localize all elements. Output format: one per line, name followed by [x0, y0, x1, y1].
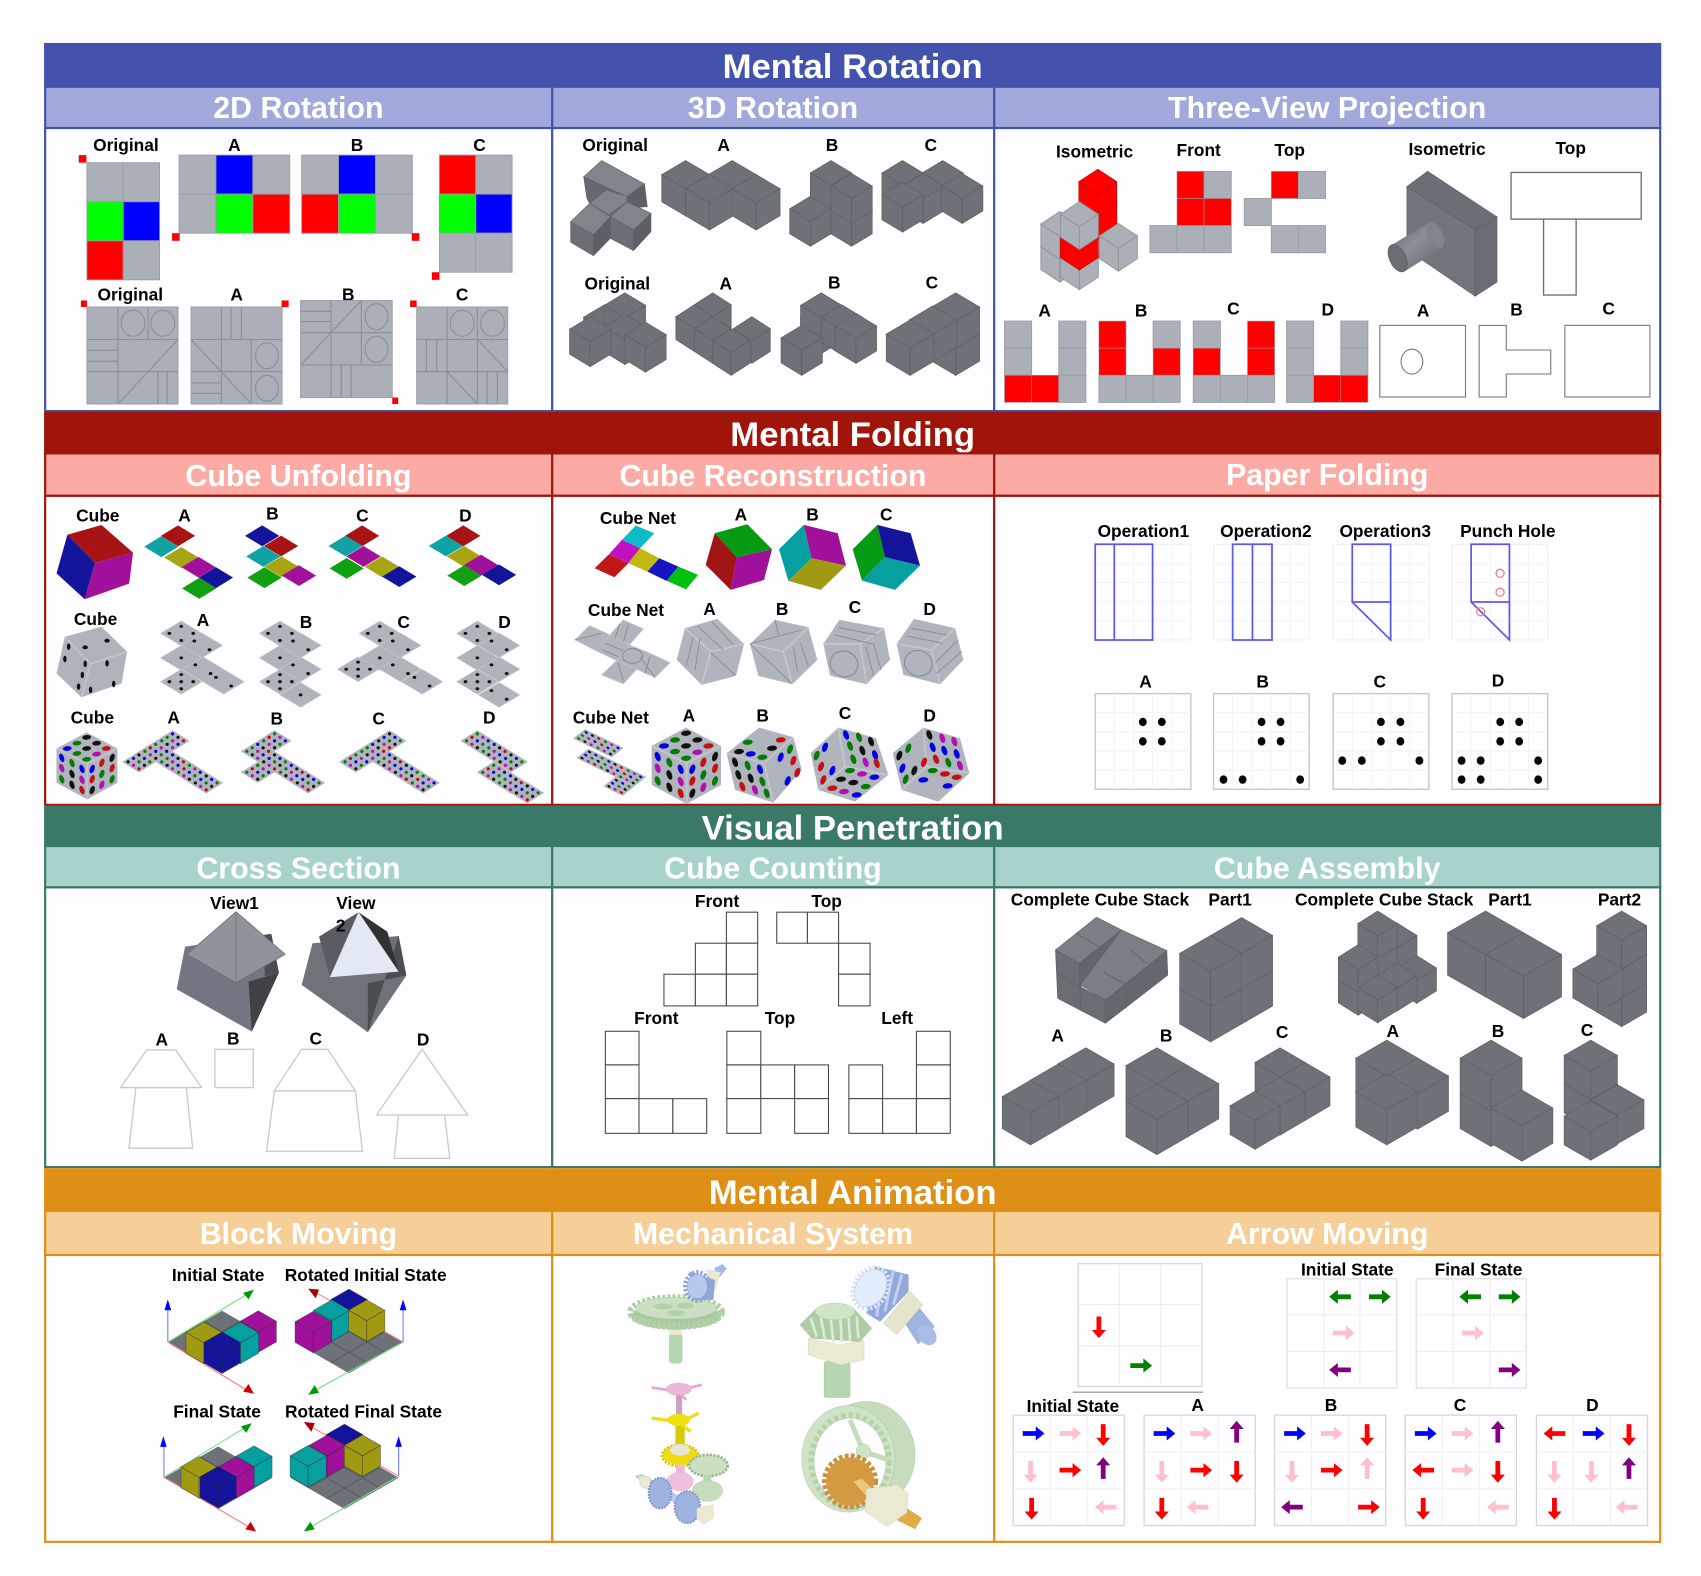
- subheading: 2D Rotation: 2D Rotation: [213, 92, 384, 125]
- multicolor net and cubes: C: [839, 703, 852, 723]
- gray patterned net and cubes: Cube Net: [588, 600, 664, 620]
- colored cube and nets: [57, 504, 516, 599]
- colored net and cubes: [595, 505, 920, 590]
- subheading: Cube Unfolding: [45, 453, 552, 496]
- assembly puzzle 1: C: [1276, 1022, 1289, 1042]
- outline answer options: C: [1602, 299, 1615, 319]
- subheading: 2D Rotation: [45, 87, 552, 128]
- bevel gear pair: [800, 1261, 941, 1397]
- panel: 3D Rotation: [552, 87, 994, 411]
- section header: Visual Penetration: [44, 806, 1661, 848]
- colored cube and nets: C: [356, 506, 369, 526]
- projection set 1: [664, 891, 870, 1006]
- solid view 2: 2: [336, 916, 346, 936]
- block figures row 2: C: [926, 273, 939, 293]
- subheading: 3D Rotation: [552, 87, 994, 128]
- punch hole answers: C: [1374, 672, 1387, 692]
- gray patterned net and cubes: [575, 597, 963, 685]
- assembly puzzle 2: [1295, 890, 1647, 1161]
- punch hole answers: A: [1139, 672, 1152, 692]
- subheading: Cross Section: [45, 846, 552, 887]
- gray patterned net and cubes: B: [776, 599, 788, 619]
- U-shaped answer options: B: [1135, 301, 1147, 321]
- subheading: Cube Unfolding: Cube Unfolding: [185, 460, 411, 493]
- projection set 2: Front: [634, 1008, 679, 1028]
- projection set 1: Front: [695, 891, 739, 911]
- gear pair with horizontal crown wheel: [631, 1264, 727, 1363]
- dotted die and nets: A: [197, 610, 210, 630]
- U-shaped answer options: [1005, 299, 1368, 402]
- dotted die and nets: B: [300, 612, 312, 632]
- colored grid row: [79, 135, 512, 280]
- folding operations: [1095, 521, 1556, 640]
- patterned tile row: Original: [98, 284, 163, 304]
- multicolor dotted cube and nets: [56, 707, 544, 803]
- subheading: Cube Assembly: [994, 846, 1660, 887]
- panel: Cube Unfolding: [45, 453, 552, 805]
- subheading: Mechanical System: [552, 1211, 994, 1255]
- cross section options: D: [417, 1030, 429, 1050]
- section: Mental Rotation: [44, 43, 1661, 411]
- dotted die and nets: Cube: [74, 609, 118, 629]
- answer arrow grids: A: [1191, 1395, 1204, 1415]
- cross section options: B: [227, 1029, 240, 1049]
- folding operations: Operation2: [1220, 521, 1312, 541]
- colored net and cubes: C: [880, 505, 893, 525]
- punch hole answers: D: [1492, 671, 1504, 691]
- gray patterned net and cubes: D: [923, 599, 936, 619]
- section header: Visual Penetration: Visual Penetration: [702, 810, 1004, 848]
- panel: Cube Counting: [552, 846, 994, 1167]
- multicolor dotted cube and nets: D: [483, 707, 496, 727]
- subheading: Cube Counting: [552, 846, 994, 887]
- assembly puzzle 2: C: [1581, 1020, 1594, 1040]
- section header: Mental Rotation: Mental Rotation: [723, 48, 983, 86]
- subheading: Cross Section: Cross Section: [196, 853, 400, 886]
- panel: Cube Assembly: [994, 846, 1660, 1167]
- initial state blocks: [164, 1265, 276, 1394]
- cross section options: C: [310, 1029, 323, 1049]
- subheading: Cube Counting: Cube Counting: [664, 853, 882, 886]
- subheading: Paper Folding: Paper Folding: [1226, 459, 1428, 492]
- block figures row 2: Original: [585, 274, 650, 294]
- answer arrow grids: C: [1454, 1395, 1467, 1415]
- ring and pinion gear: [802, 1401, 922, 1529]
- answer arrow grids: Initial State: [1027, 1396, 1119, 1416]
- block figures row 1: B: [826, 135, 838, 155]
- colored cube and nets: Cube: [76, 506, 120, 526]
- isometric cube stack with views: Isometric: [1056, 141, 1133, 161]
- isometric plate with cylinder and top view: Isometric: [1408, 139, 1486, 159]
- block figures row 1: Original: [582, 135, 648, 155]
- panel: Paper Folding: [994, 453, 1660, 805]
- final state blocks: Final State: [173, 1402, 261, 1422]
- subheading: Block Moving: Block Moving: [200, 1218, 397, 1251]
- U-shaped answer options: A: [1038, 301, 1051, 321]
- answer arrow grids: B: [1325, 1395, 1337, 1415]
- outline answer options: B: [1510, 300, 1523, 320]
- answer arrow grids: [1013, 1395, 1648, 1525]
- panel: Block Moving: [45, 1211, 552, 1542]
- section header: Mental Rotation: [44, 43, 1661, 87]
- isometric cube stack with views: Top: [1275, 140, 1305, 160]
- folding operations: Punch Hole: [1460, 521, 1556, 541]
- multicolor net and cubes: D: [923, 705, 936, 725]
- section: Visual Penetration: [44, 806, 1661, 1167]
- final state blocks: [160, 1402, 272, 1532]
- solid view 2: View: [336, 893, 376, 913]
- gray patterned net and cubes: C: [849, 597, 862, 617]
- assembly puzzle 1: A: [1051, 1025, 1064, 1045]
- assembly puzzle 1: Complete Cube Stack: [1011, 890, 1189, 910]
- assembly puzzle 1: Part1: [1208, 890, 1252, 910]
- patterned tile row: C: [456, 284, 469, 304]
- block figures row 2: A: [719, 274, 732, 294]
- colored cube and nets: B: [266, 504, 279, 524]
- dotted die and nets: [57, 609, 520, 707]
- patterned tile row: [81, 284, 508, 404]
- assembly puzzle 2: A: [1387, 1021, 1400, 1041]
- panel: Mechanical System: [552, 1211, 994, 1542]
- multicolor dotted cube and nets: A: [167, 707, 180, 727]
- subheading: Three-View Projection: [994, 87, 1660, 128]
- cross section options: A: [155, 1030, 168, 1050]
- assembly puzzle 2: B: [1492, 1021, 1504, 1041]
- solid view 1: [177, 893, 285, 1032]
- subheading: Paper Folding: [994, 453, 1660, 496]
- isometric plate with cylinder and top view: [1384, 138, 1641, 296]
- rotated final state blocks: [285, 1402, 442, 1532]
- panel: Three-View Projection: [994, 87, 1660, 411]
- panel: 2D Rotation: [45, 87, 552, 411]
- block figures row 2: [570, 273, 980, 375]
- gear illustrations: [631, 1261, 941, 1529]
- section header: Mental Folding: Mental Folding: [730, 416, 975, 454]
- projection set 2: [605, 1008, 950, 1133]
- projection set 2: Left: [881, 1008, 913, 1028]
- section header: Mental Animation: [44, 1168, 1661, 1212]
- dotted die and nets: C: [397, 612, 410, 632]
- large arrow grid: [1073, 1264, 1203, 1392]
- multicolor net and cubes: [569, 703, 969, 804]
- multicolor dotted cube and nets: Cube: [71, 707, 114, 727]
- assembly puzzle 1: B: [1160, 1025, 1172, 1045]
- outline answer options: A: [1417, 301, 1430, 321]
- folding operations: Operation1: [1098, 521, 1189, 541]
- patterned tile row: B: [342, 284, 355, 304]
- punch hole answers: B: [1256, 672, 1269, 692]
- block figures row 1: A: [717, 135, 730, 155]
- colored grid row: C: [473, 135, 486, 155]
- subheading: Arrow Moving: Arrow Moving: [1226, 1218, 1428, 1251]
- colored grid row: A: [228, 135, 241, 155]
- section: Mental Animation: [44, 1168, 1661, 1542]
- multicolor net and cubes: A: [683, 705, 696, 725]
- panel: Cross Section: [45, 846, 552, 1167]
- assembly puzzle 2: Complete Cube Stack: [1295, 890, 1474, 910]
- subheading: Cube Reconstruction: Cube Reconstruction: [619, 460, 926, 493]
- panel: Cube Reconstruction: [552, 453, 994, 805]
- subheading: Three-View Projection: Three-View Projection: [1168, 92, 1486, 125]
- multicolor dotted cube and nets: C: [372, 709, 385, 729]
- rotated initial state blocks: Rotated Initial State: [285, 1265, 447, 1285]
- dotted die and nets: D: [498, 612, 511, 632]
- subheading: Cube Reconstruction: [552, 453, 994, 496]
- panel: Arrow Moving: [994, 1211, 1660, 1542]
- initial and final state grids: Initial State: [1301, 1260, 1394, 1280]
- block figures row 2: B: [828, 273, 840, 293]
- subheading: Block Moving: [45, 1211, 552, 1255]
- multicolor dotted cube and nets: B: [270, 709, 283, 729]
- U-shaped answer options: C: [1227, 299, 1240, 319]
- subheading: 3D Rotation: 3D Rotation: [688, 92, 858, 125]
- punch hole answers: [1095, 671, 1548, 789]
- assembly puzzle 2: Part2: [1598, 890, 1641, 910]
- colored cube and nets: D: [459, 506, 472, 526]
- assembly puzzle 2: Part1: [1488, 890, 1532, 910]
- subheading: Cube Assembly: Cube Assembly: [1214, 853, 1441, 886]
- section header: Mental Folding: [44, 412, 1661, 454]
- U-shaped answer options: D: [1321, 300, 1334, 320]
- multi-stage gear train: [635, 1383, 728, 1524]
- assembly puzzle 1: [1002, 890, 1330, 1155]
- colored net and cubes: B: [806, 505, 819, 525]
- initial and final state grids: Final State: [1435, 1260, 1523, 1280]
- block figures row 1: C: [924, 135, 937, 155]
- subheading: Mechanical System: Mechanical System: [633, 1218, 913, 1251]
- colored net and cubes: A: [735, 505, 748, 525]
- projection set 2: Top: [765, 1008, 795, 1028]
- solid view 2: [302, 893, 406, 1032]
- outline answer options: [1380, 299, 1650, 397]
- rotated final state blocks: Rotated Final State: [285, 1402, 442, 1422]
- gray patterned net and cubes: A: [703, 599, 716, 619]
- isometric plate with cylinder and top view: Top: [1555, 138, 1586, 158]
- colored cube and nets: A: [178, 506, 191, 526]
- section header: Mental Animation: Mental Animation: [709, 1174, 997, 1212]
- cross section options: [121, 1029, 468, 1158]
- colored net and cubes: Cube Net: [600, 508, 676, 528]
- isometric cube stack with views: [1041, 140, 1326, 290]
- patterned tile row: A: [230, 284, 243, 304]
- folding operations: Operation3: [1339, 521, 1431, 541]
- multicolor net and cubes: B: [756, 705, 769, 725]
- solid view 1: View1: [210, 893, 259, 913]
- colored grid row: B: [351, 135, 363, 155]
- subheading: Arrow Moving: [994, 1211, 1660, 1255]
- colored grid row: Original: [93, 135, 159, 155]
- answer arrow grids: D: [1586, 1395, 1599, 1415]
- projection set 1: Top: [811, 891, 842, 911]
- initial and final state grids: [1287, 1260, 1526, 1388]
- rotated initial state blocks: [285, 1265, 447, 1395]
- multicolor net and cubes: Cube Net: [573, 707, 649, 727]
- isometric cube stack with views: Front: [1177, 140, 1221, 160]
- section: Mental Folding: [44, 412, 1661, 805]
- block figures row 1: [571, 135, 983, 256]
- initial state blocks: Initial State: [172, 1265, 265, 1285]
